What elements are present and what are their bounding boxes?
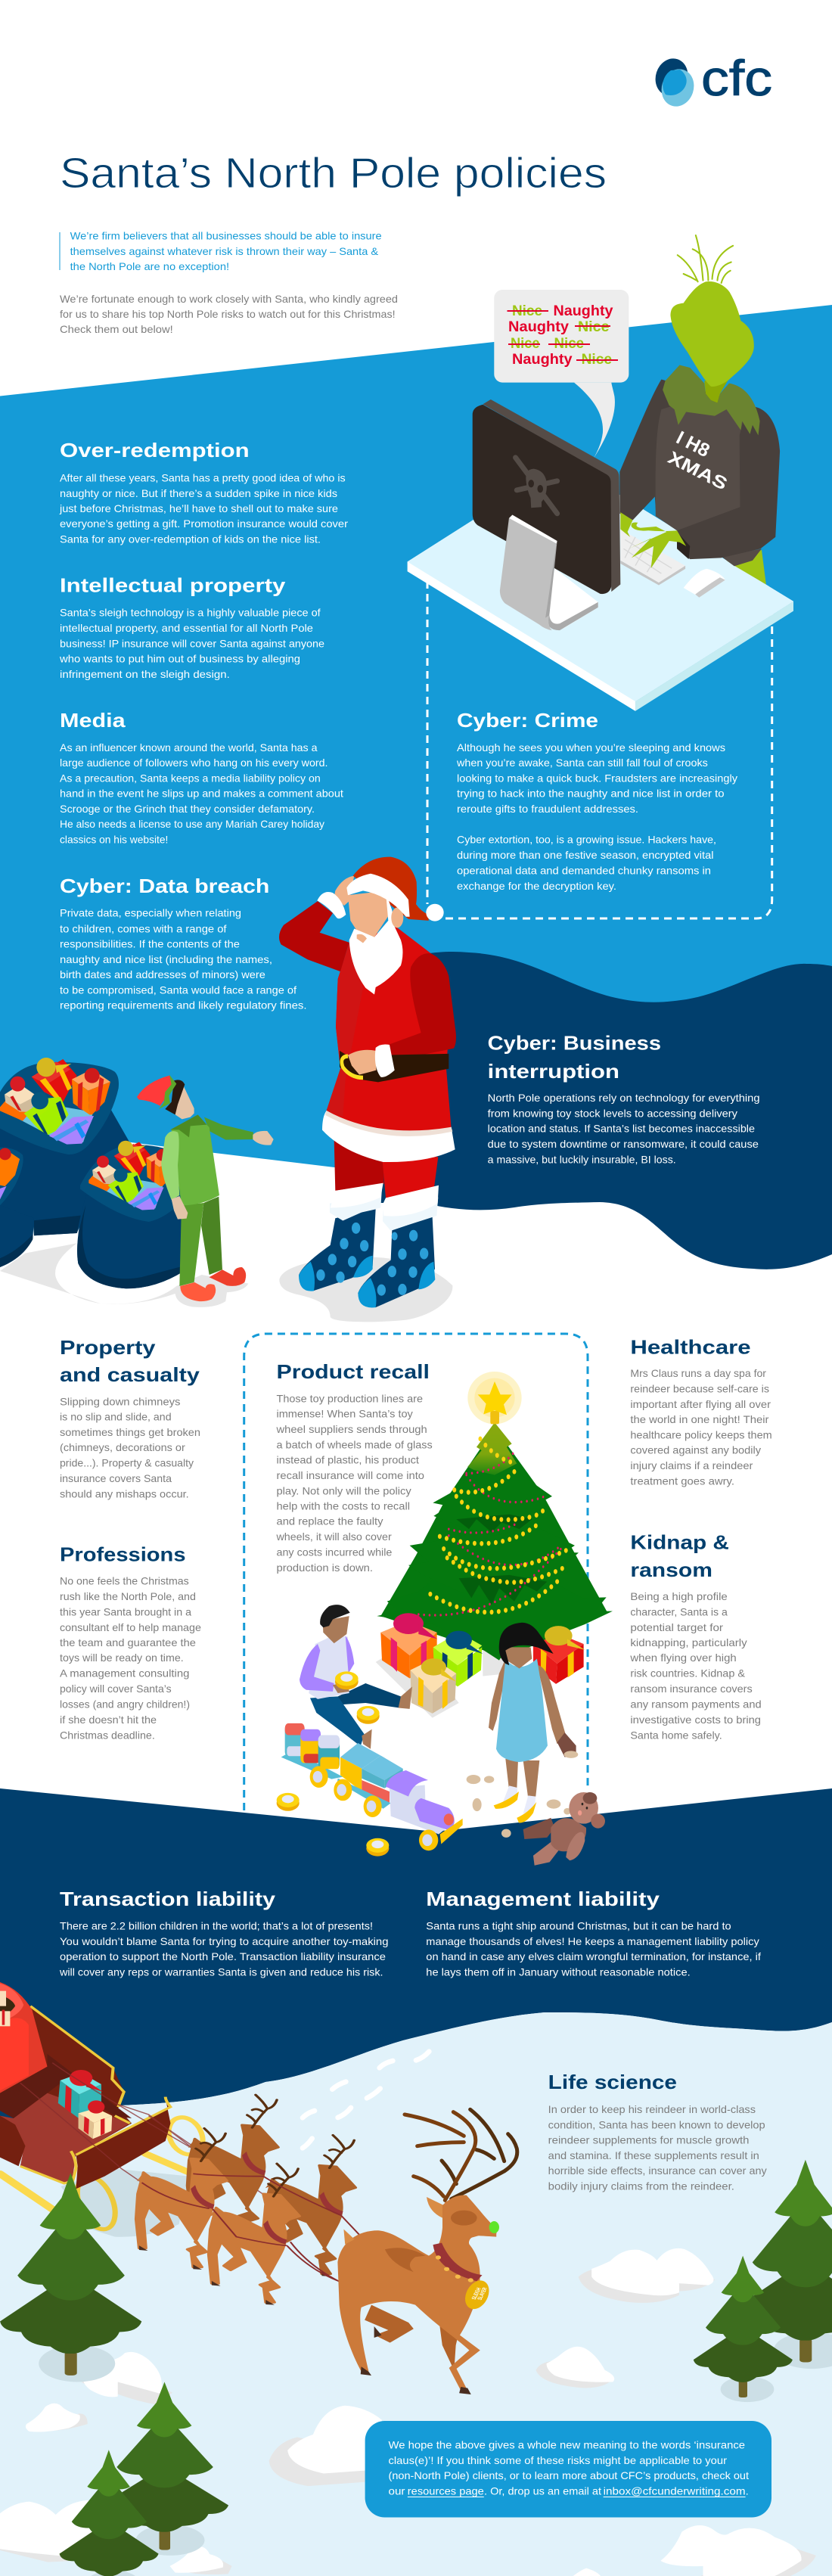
section: cyber crime: reroute gifts to fraudulent addresses. [457,803,638,815]
section: healthcare: Healthcare [630,1335,751,1358]
section: professions: rush like the North Pole, and [60,1590,196,1602]
section: healthcare: reindeer because self-care is [630,1383,769,1395]
intro callout [59,230,382,272]
intro callout: the North Pole are no exception! [70,260,229,272]
section: cyber business interruption: interruption [488,1060,619,1083]
santa raised hand [334,876,354,906]
section: kidnap and ransom: any ransom payments and [630,1698,762,1711]
section: cyber data breach: Private data, especially when relating [60,907,241,919]
title: Santa’s North Pole policies [60,149,607,197]
section: cyber crime: Although he sees you when you’re sleeping and knows [457,741,725,754]
section: cyber data breach: to be compromised, Santa would face a range of [60,983,296,996]
section: professions [60,1543,201,1742]
section: management liability: he lays them off in January without reasonable notice. [426,1965,691,1978]
closing callout: inbox@cfcunderwriting.com [604,2485,746,2497]
section: management liability: manage thousands of elves! He keeps a management liability policy [426,1935,759,1947]
section: intellectual property: Intellectual property [60,574,286,597]
intro text [60,293,398,335]
grinch legs [726,550,766,585]
cloud [660,2525,816,2576]
elf [137,1075,274,1301]
santa face [348,890,388,937]
sleigh shadow [61,2169,189,2237]
santa coat [322,927,455,1162]
medal: SLEIGH [471,2287,483,2301]
section: kidnap and ransom: when flying over high [629,1652,737,1664]
section: property and casualty: Property [60,1336,156,1359]
sleigh left wall [0,2116,25,2166]
toy stuffing [467,1775,571,1838]
grinch hands [620,512,686,568]
illustration: santa [279,857,456,1322]
section: media: Scrooge or the Grinch that they consider defamatory. [60,803,315,815]
santa raised cuff [317,892,346,918]
santa shadow [279,1257,452,1322]
tree garlands [418,1439,570,1615]
reindeer team [136,2095,496,2394]
gift: cream [410,1658,456,1714]
section: healthcare: the world in one night! Their [630,1413,769,1425]
tree: bottom front [59,2450,159,2576]
section: professions: Christmas deadline. [60,1729,155,1742]
section: media: hand in the event he slips up and makes a comment about [60,788,343,800]
big reindeer legs [365,2295,466,2370]
big reindeer tail [343,2230,355,2245]
section: healthcare: injury claims if a reindeer [630,1459,753,1471]
cloud [169,2546,232,2574]
section: cyber crime: trying to hack into the naughty and nice list in order to [457,788,725,800]
intro callout: themselves against whatever risk is thrown their way – Santa & [70,245,379,257]
icon: green nose [489,2221,499,2233]
reindeer antlers [405,2109,517,2200]
cloud [536,2347,614,2388]
section: intellectual property: Santa’s sleigh technology is a highly valuable piece of [60,607,321,619]
sweater slogan: XMAS [665,447,731,494]
santa right arm [388,953,456,1061]
boy [300,1605,412,1749]
section: product recall: recall insurance will come into [277,1469,424,1481]
sleigh seat [0,1982,47,2093]
medal: SLAYER [477,2287,489,2301]
santa boot fur [330,1183,439,1231]
section: property and casualty: and casualty [60,1363,200,1386]
section: kidnap and ransom: ransom [630,1558,712,1581]
speech bubble words: Naughty [508,319,569,335]
gift: teal [58,2070,103,2118]
section: kidnap and ransom: Santa home safely. [630,1729,722,1742]
reindeer ear [427,2197,444,2218]
star glow [467,1372,522,1424]
section: transaction liability: operation to support the North Pole. Transaction liability insurance [60,1950,386,1962]
intro text: We’re fortunate enough to work closely with Santa, who kindly agreed [60,293,398,305]
section: life science: reindeer supplements for muscle growth [548,2134,749,2146]
gifts in seat [0,1991,10,2026]
section: media: Media [60,709,126,732]
icon: tree top star [478,1381,512,1424]
christmas tree [377,1422,613,1676]
reindeer: back left [188,2095,278,2236]
section: management liability: Management liability [426,1888,660,1910]
section: over-redemption: Santa for any over-redemption of kids on the nice list. [60,533,321,545]
illustration: christmas tree with children and toys [277,1372,613,1866]
section: property and casualty: sometimes things get broken [60,1426,200,1438]
illustration: present sacks and elf [0,1058,274,1307]
closing callout: We hope the above gives a whole new meaning to the words ‘insurance [389,2438,745,2450]
speech bubble words: Nice [511,336,540,352]
section: healthcare: important after flying all over [630,1398,771,1410]
section: product recall: wheel suppliers sends through [275,1423,427,1435]
section: cyber data breach: Cyber: Data breach [60,875,269,897]
cloud [0,2500,116,2562]
section: media: classics on his website! [60,834,168,846]
reindeer face [442,2195,497,2249]
cloud [579,2248,716,2303]
section: over-redemption: Over-redemption [60,439,250,461]
grinch fur collar [663,365,760,436]
desk [408,461,793,711]
section: cyber business interruption: Cyber: Business [488,1032,661,1055]
section: cyber crime: exchange for the decryption key. [457,880,616,892]
section: cyber data breach: responsibilities. If the contents of the [60,938,240,950]
logo: cfc: cfc [701,50,772,106]
collar studs [436,2255,473,2282]
speech bubble words: Nice [512,303,542,319]
gift: red [533,1626,585,1684]
girl [489,1623,578,1822]
gift: lime [433,1631,483,1686]
closing callout: (non-North Pole) clients, or to learn more about CFC’s products, check out [389,2469,749,2481]
section: media: As an influencer known around the world, Santa has a [60,741,318,754]
section: transaction liability: There are 2.2 billion children in the world; that’s a lot of presents! [60,1920,373,1932]
section: healthcare: treatment goes awry. [630,1474,734,1487]
sleigh front prow [76,2098,170,2189]
section: cyber crime: operational data and demanded chunky ransoms in [457,864,711,876]
section: property and casualty [60,1336,200,1499]
section: transaction liability: will cover any reps or warranties Santa is given and reduce his risk. [59,1965,383,1978]
closing callout: claus(e)’! If you think some of these risks might be applicable to your [389,2454,727,2466]
section: life science: Life science [548,2071,677,2093]
section: product recall: help with the costs to recall [277,1499,410,1512]
panel: light snow section [0,2012,832,2576]
panel: navy liability section [0,1788,832,2126]
sack: back left [0,1058,131,1235]
monitor stand [500,515,598,630]
keyboard [620,530,685,586]
icon: skull and crossbones [516,458,557,514]
cloud [26,2404,88,2432]
panel: product recall dashed frame [244,1334,588,1810]
toy train [281,1723,463,1850]
santa belt [340,1051,449,1082]
big reindeer head and antlers [405,2109,517,2249]
teddy bear [523,1792,605,1866]
reindeer: middle left [136,2128,227,2270]
santa hat back [353,857,429,921]
toy wheels [277,1671,389,1857]
clouds [0,2248,816,2576]
speech bubble words: Nice [578,319,610,335]
santa buckle [342,1056,363,1077]
speech bubble words: Nice [582,352,612,368]
section: kidnap and ransom [629,1530,762,1742]
section: media: He also needs a license to use any Mariah Carey holiday [60,818,324,830]
big reindeer collar [435,2245,480,2279]
medal [461,2279,493,2311]
section: intellectual property [59,574,324,680]
section: cyber crime: looking to make a quick buck. Fraudsters are increasingly [457,772,737,784]
reindeer eye patch [451,2211,477,2226]
section: transaction liability: You wouldn’t blame Santa for trying to acquire another toy-making [60,1935,389,1947]
section: product recall: play. Not only will the policy [277,1484,411,1496]
panel: cyber crime dashed frame [427,581,772,918]
section: kidnap and ransom: potential target for [630,1621,723,1633]
santa hat pompom [426,904,444,921]
section: kidnap and ransom: Kidnap & [630,1530,729,1553]
section: over-redemption: just before Christmas, he’ll have to shell out to make sure [59,502,338,514]
section: kidnap and ransom: ransom insurance covers [630,1683,753,1695]
section: cyber business interruption: a massive, but luckily insurable, BI loss. [488,1154,676,1166]
grinch body [619,379,780,566]
section: media: large audience of followers who hang on his every word. [60,757,328,769]
sweater slogan [665,427,731,494]
section: cyber crime [456,709,737,892]
section: management liability: Santa runs a tight ship around Christmas, but it can be hard to [426,1920,731,1932]
big reindeer body [337,2202,496,2391]
intro text: Check them out below! [60,323,173,335]
section: management liability [426,1888,761,1978]
section: property and casualty: Slipping down chimneys [60,1395,180,1407]
harness reins [141,2174,473,2295]
section: over-redemption: naughty or nice. But if there’s a sudden spike in nice kids [60,487,337,499]
section: property and casualty: pride...). Property & casualty [60,1457,194,1469]
cloud [269,2406,382,2486]
section: cyber crime: during more than one festive season, encrypted vital [457,849,714,861]
santa beard [349,892,403,995]
section: property and casualty: (chimneys, decorations or [60,1441,185,1453]
section: life science: and stamina. If these supplements result in [548,2149,759,2161]
logo: cfc [650,50,772,110]
sweater slogan: I H8 [673,427,713,461]
section: product recall: and replace the faulty [277,1515,383,1527]
section: management liability: on hand in case any elves claim wrongful termination, for instance, if [426,1950,761,1962]
section: intellectual property: who wants to put him out of business by alleging [59,653,300,665]
pine trees [0,2160,832,2576]
section: professions: A management consulting [60,1667,189,1680]
section: cyber business interruption [488,1032,760,1166]
closing callout [365,2421,771,2518]
monitor [473,399,620,594]
reindeer: back right [265,2135,355,2276]
santa raised arm [279,901,349,971]
closing callout: . [746,2485,749,2497]
section: product recall: wheels, it will also cover [275,1530,392,1543]
section: cyber crime: when you’re awake, Santa can still fall foul of crooks [456,757,708,769]
section: over-redemption: everyone’s getting a gift. Promotion insurance would cover [60,517,348,530]
gift: orange [376,1613,459,1718]
section: over-redemption [59,439,348,545]
closing callout: resources page [408,2485,484,2497]
section: kidnap and ransom: investigative costs to bring [630,1714,761,1726]
section: professions: policy will cover Santa’s [60,1683,172,1695]
section: intellectual property: intellectual property, and essential for all North Pole [60,622,313,634]
section: transaction liability [59,1888,389,1978]
sack shadow [0,1243,248,1307]
section: life science: bodily injury claims from the reindeer. [548,2180,734,2192]
section: cyber data breach: reporting requirements and likely regulatory fines. [60,999,307,1011]
section: professions: if she doesn’t hit the [60,1714,157,1726]
sack: far left [0,1148,34,1267]
section: product recall: Those toy production lines are [277,1393,423,1405]
santa boots [299,1209,435,1307]
sleigh gold trim [30,2006,124,2107]
section: life science: horrible side effects, insurance can cover any [548,2164,767,2177]
section: professions: losses (and angry children!) [60,1698,190,1711]
section: property and casualty: should any mishaps occur. [60,1487,189,1499]
speech bubble words: Naughty [512,352,573,368]
speech bubble words: Naughty [554,303,613,319]
section: cyber business interruption: location and status. If Santa’s list becomes inaccessible [488,1122,755,1134]
speech bubble words [507,303,618,368]
section: professions: this year Santa brought in a [60,1605,191,1617]
section: intellectual property: business! IP insurance will cover Santa against anyone [60,637,324,649]
section: life science: condition, Santa has been known to develop [548,2118,765,2130]
sleigh seat back [0,2054,132,2118]
section: product recall: immense! When Santa’s toy [277,1407,413,1419]
santa belly hand [348,1050,376,1075]
section: professions: toys will be ready on time. [60,1652,184,1664]
illustration: grinch at computer [408,235,793,711]
section: professions: No one feels the Christmas [60,1575,189,1587]
section: property and casualty: insurance covers Santa [60,1472,172,1484]
sleigh floor [0,2093,130,2183]
tree: right lower [694,2256,793,2402]
panel: navy business interruption wave [363,952,832,1269]
speech bubble [494,290,629,458]
section: product recall: Product recall [277,1360,430,1383]
santa trousers [334,1139,438,1198]
grinch head and hair [670,235,754,402]
cloud [573,2568,601,2576]
gift: cream in sleigh [79,2100,112,2139]
section: cyber data breach: birth dates and addresses of minors) were [60,968,265,980]
section: cyber data breach [60,875,307,1011]
speech bubble words: Nice [554,336,584,352]
section: healthcare: covered against any bodily [630,1444,761,1456]
section: healthcare: healthcare policy keeps them [630,1429,772,1441]
section: product recall: production is down. [277,1561,373,1574]
section: life science [548,2071,767,2192]
section: professions: consultant elf to help manage [60,1621,201,1633]
section: professions: the team and guarantee the [60,1636,196,1648]
mouse [684,569,725,598]
section: cyber data breach: naughty and nice list (including the names, [60,953,272,965]
section: cyber business interruption: North Pole operations rely on technology for everything [488,1092,760,1104]
intro callout: We’re firm believers that all businesses should be able to insure [70,230,382,242]
section: cyber data breach: to children, comes with a range of [60,922,227,934]
santa cuff [375,1044,395,1077]
reindeer: front small [209,2164,300,2305]
panel: blue diagonal section [0,305,832,1177]
intro text: for us to share his top North Pole risks to watch out for this Christmas! [60,308,396,320]
sleigh front trim [20,2097,170,2183]
section: over-redemption: After all these years, Santa has a pretty good idea of who is [60,472,346,484]
section: cyber business interruption: due to system downtime or ransomware, it could cause [488,1138,759,1150]
section: cyber crime: Cyber extortion, too, is a growing issue. Hackers have, [457,834,716,846]
section: professions: Professions [60,1543,186,1566]
illustration: sleigh [0,1982,270,2237]
snow footprints [303,2052,429,2148]
section: kidnap and ransom: risk countries. Kidnap & [630,1667,746,1680]
section: life science: In order to keep his reindeer in world-class [548,2103,756,2115]
sack: front [77,1141,184,1288]
sleigh rear runner loop [0,2115,208,2233]
big reindeer body shading [385,2248,425,2272]
santa hat brim [346,874,410,917]
section: cyber business interruption: from knowing toy stock levels to accessing delivery [488,1108,737,1120]
closing callout: . Or, drop us an email at [484,2485,601,2497]
section: product recall: instead of plastic, his product [277,1454,419,1466]
section: product recall: a batch of wheels made of glass [277,1438,433,1450]
section: kidnap and ransom: kidnapping, particularly [630,1636,747,1648]
section: property and casualty: is no slip and slide, and [60,1410,172,1422]
cloud [77,2352,172,2405]
section: intellectual property: infringement on the sleigh design. [60,668,230,680]
section: product recall: any costs incurred while [277,1546,393,1558]
closing callout: our [389,2485,405,2497]
section: media [60,709,343,846]
section: kidnap and ransom: character, Santa is a [630,1605,728,1617]
tree: bottom back [101,2382,228,2556]
section: product recall [275,1360,433,1574]
section: cyber crime: Cyber: Crime [457,709,598,732]
section: media: As a precaution, Santa keeps a media liability policy on [60,772,321,784]
tree: left upper [0,2173,141,2382]
tree: right upper [735,2160,832,2369]
big reindeer hooves [361,2366,471,2394]
section: transaction liability: Transaction liability [60,1888,276,1910]
sleigh far wall [0,1982,132,2155]
harness lines [20,2063,270,2199]
section: healthcare: Mrs Claus runs a day spa for [630,1367,766,1379]
section: healthcare [630,1335,772,1487]
section: kidnap and ransom: Being a high profile [630,1590,728,1602]
